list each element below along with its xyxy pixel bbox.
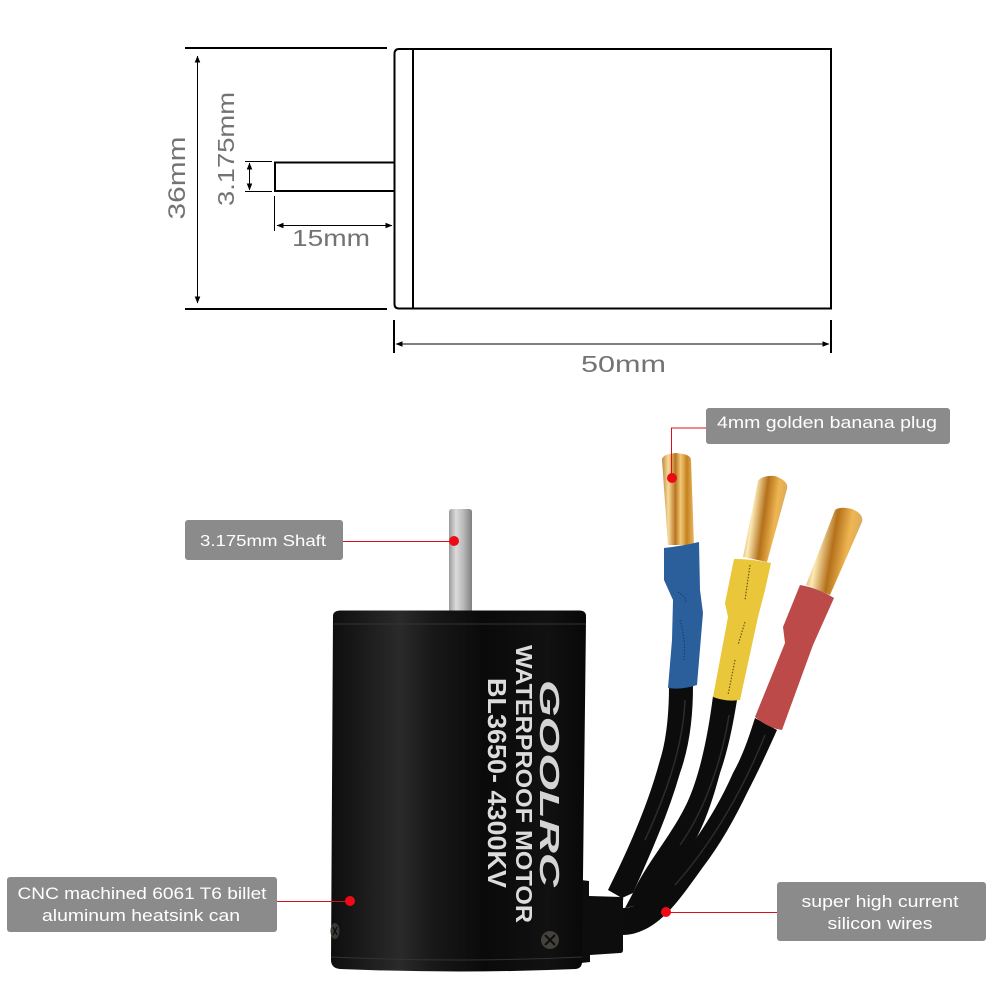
label box — [7, 877, 277, 932]
motor body outline — [394, 49, 831, 308]
label box — [706, 408, 950, 444]
label text line one: super high current — [802, 892, 959, 911]
yellow heat shrink — [713, 559, 771, 701]
wire clamp — [581, 880, 623, 963]
brand text: GOOLRC — [534, 680, 565, 888]
label box — [185, 520, 343, 560]
wire highlights — [645, 700, 765, 885]
shaft diameter label: 3.175mm — [213, 92, 239, 206]
label text: 3.175mm Shaft — [200, 533, 327, 550]
label text line two: aluminum heatsink can — [42, 907, 240, 925]
height arrow — [196, 56, 198, 303]
leader line — [672, 428, 706, 478]
gold plug blue — [662, 453, 694, 545]
shaft diameter arrow — [248, 163, 250, 190]
bottom bevel line — [331, 957, 582, 960]
callout: heatsink can — [7, 877, 355, 932]
shrink marking blue — [678, 592, 686, 660]
callout: banana plug — [667, 408, 950, 483]
shaft diameter ticks — [245, 162, 272, 192]
leader line — [343, 540, 454, 542]
label box — [777, 882, 986, 941]
dimension drawing — [164, 48, 831, 377]
width ticks — [394, 320, 831, 353]
body divider — [412, 49, 414, 309]
top bevel line — [334, 623, 586, 625]
height label: 36mm — [164, 136, 191, 220]
marker dot — [345, 896, 355, 906]
width label: 50mm — [581, 351, 666, 377]
shaft — [449, 509, 472, 612]
leader line — [277, 900, 350, 902]
shrink marking yellow — [728, 565, 750, 695]
marker dot — [667, 473, 677, 483]
width arrow — [396, 343, 829, 345]
model number text: BL3650- 4300KV — [482, 678, 512, 889]
marker dot — [449, 536, 459, 546]
gold plug yellow — [743, 476, 787, 562]
screw right — [541, 931, 559, 949]
shaft length label: 15mm — [292, 225, 370, 251]
shaft outline — [275, 162, 394, 191]
label text line two: silicon wires — [828, 914, 932, 933]
blue heat shrink — [664, 542, 703, 689]
red heat shrink — [755, 585, 834, 730]
label text: 4mm golden banana plug — [717, 413, 937, 432]
leader line — [666, 912, 777, 914]
motor photo — [330, 453, 862, 972]
callout: shaft — [185, 520, 459, 560]
black silicone wires — [608, 686, 777, 935]
label text line one: CNC machined 6061 T6 billet — [18, 885, 267, 903]
screw left — [330, 923, 340, 939]
shaft length tick — [274, 196, 276, 231]
marker dot — [661, 907, 671, 917]
height extension lines — [185, 48, 387, 309]
gold plug red — [806, 508, 862, 595]
waterproof motor text: WATERPROOF MOTOR — [511, 645, 537, 923]
motor can — [331, 610, 586, 972]
callout: silicon wires — [661, 882, 986, 941]
shaft length arrow — [277, 224, 392, 226]
